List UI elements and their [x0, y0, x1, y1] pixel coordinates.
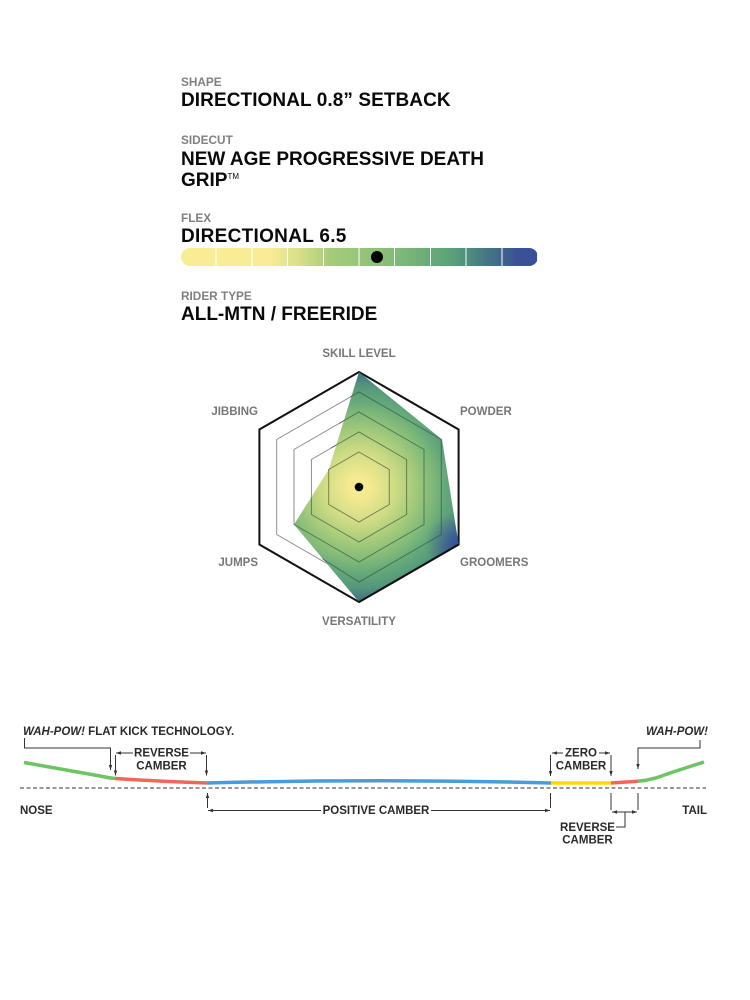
radar center dot	[355, 483, 363, 491]
label: zero camber: CAMBER	[556, 760, 607, 772]
flex scale bar	[181, 248, 538, 266]
label: wah-pow tail: WAH-POW!	[646, 726, 708, 738]
flex label: FLEX	[181, 211, 211, 225]
sidecut label: SIDECUT	[181, 133, 233, 147]
shape value: DIRECTIONAL 0.8” SETBACK	[181, 90, 451, 111]
shape label: SHAPE	[181, 75, 222, 89]
label: jibbing: JIBBING	[211, 406, 258, 418]
radar outer hexagon	[259, 372, 459, 602]
rider type value: ALL-MTN / FREERIDE	[181, 304, 377, 325]
annotation text	[20, 726, 708, 846]
label: tail: TAIL	[682, 805, 707, 817]
radar edge reinforce	[359, 544, 459, 602]
label: reverse camber nose: CAMBER	[136, 760, 187, 772]
camber: nose kick	[24, 762, 115, 778]
camber profile diagram	[20, 726, 708, 846]
sidecut value	[181, 148, 484, 190]
label: zero camber: ZERO	[565, 748, 597, 760]
label: groomers: GROOMERS	[460, 557, 529, 569]
camber: tail kick	[638, 762, 704, 781]
label: reverse camber tail: REVERSE	[560, 822, 615, 834]
sidecut value: NEW AGE PROGRESSIVE DEATH	[181, 148, 484, 170]
label: nose: NOSE	[20, 805, 53, 817]
spec: rider type	[181, 289, 377, 325]
flex marker dot	[371, 251, 383, 263]
label: skill level: SKILL LEVEL	[322, 348, 396, 360]
label: powder: POWDER	[460, 406, 512, 418]
camber: positive	[207, 781, 551, 783]
label: wah-pow flat kick: WAH-POW! FLAT KICK TECHNOLOGY.	[23, 726, 234, 738]
radar groomers corner shade	[294, 372, 459, 602]
rider type label: RIDER TYPE	[181, 289, 252, 303]
label: reverse camber tail: CAMBER	[562, 834, 613, 846]
spec: shape	[181, 75, 451, 111]
sidecut value: GRIPTM	[181, 170, 239, 190]
radar rings over data	[294, 392, 441, 582]
label: versatility: VERSATILITY	[322, 616, 396, 628]
camber: zero	[551, 781, 611, 785]
spec: flex	[181, 211, 538, 266]
camber: nose reverse	[115, 778, 207, 783]
annotation lines	[24, 738, 700, 827]
label: reverse camber nose: REVERSE	[134, 748, 189, 760]
radar axis labels	[211, 348, 529, 628]
camber: tail reverse	[611, 781, 638, 783]
baseline	[20, 787, 706, 789]
spec: sidecut	[181, 133, 484, 190]
label: jumps: JUMPS	[218, 557, 258, 569]
flex value: DIRECTIONAL 6.5	[181, 226, 347, 247]
label: positive camber: POSITIVE CAMBER	[323, 805, 430, 817]
radar rings	[277, 392, 441, 582]
radar data area	[294, 372, 459, 602]
